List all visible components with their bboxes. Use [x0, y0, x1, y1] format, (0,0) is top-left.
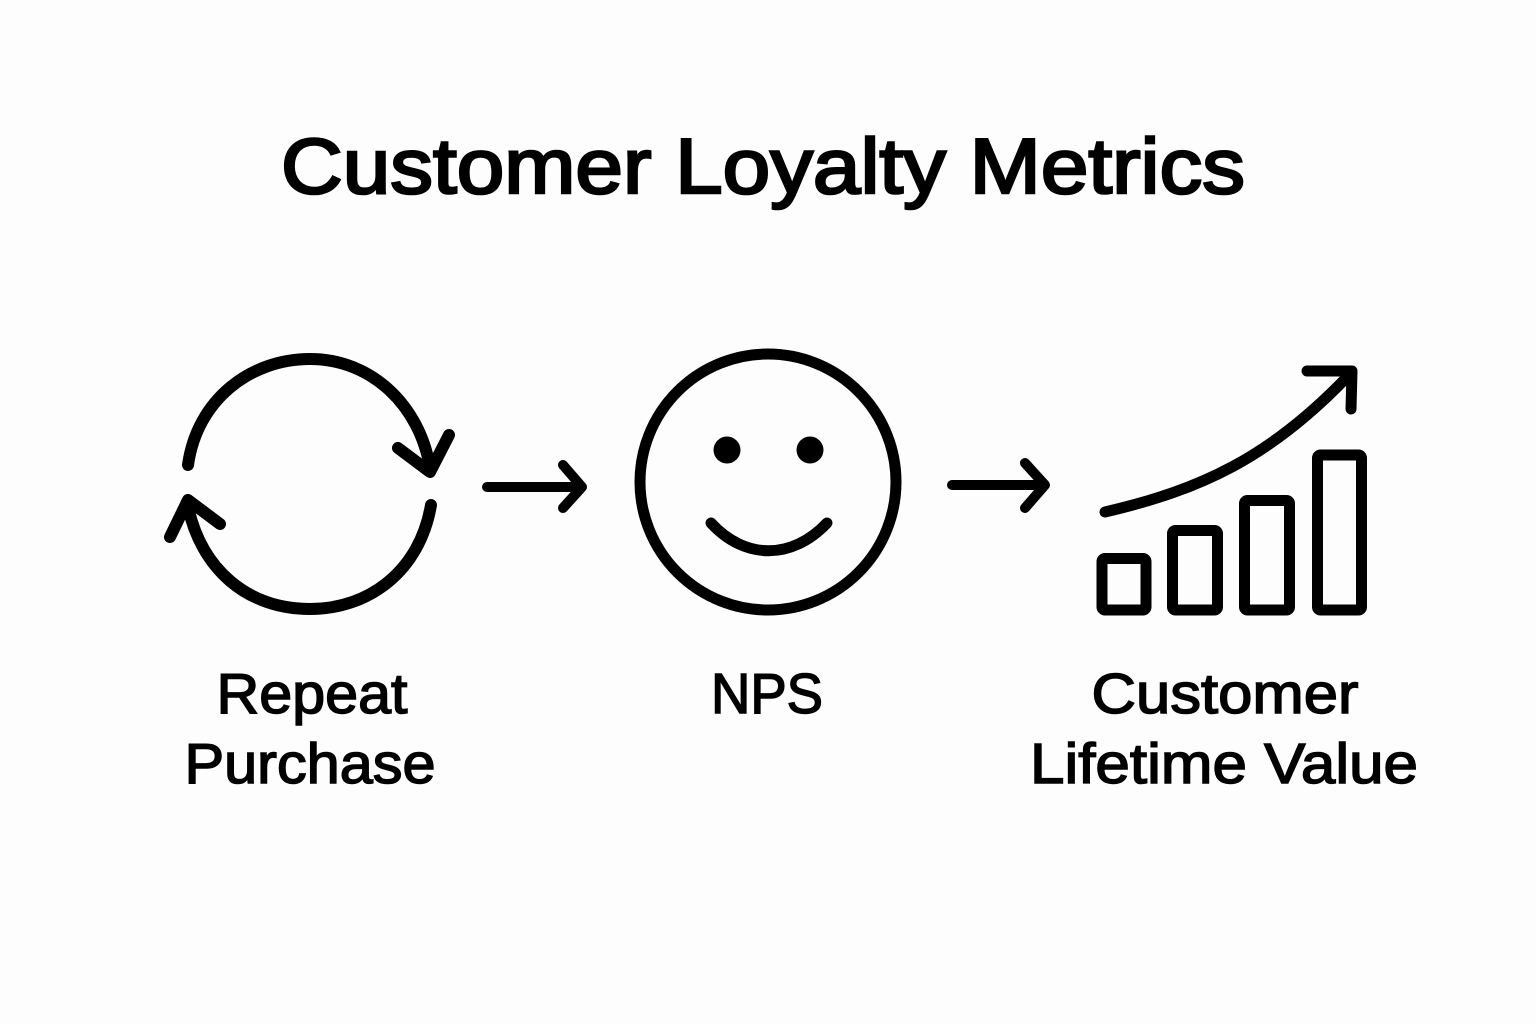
label: customer lifetime value: Lifetime Value	[1030, 732, 1418, 796]
label: customer lifetime value: Customer	[1092, 662, 1359, 726]
icon: repeat cycle arrows	[170, 359, 449, 609]
icon: smiley face	[640, 354, 896, 610]
title: Customer Loyalty Metrics	[281, 122, 1245, 210]
arrow: repeat purchase to NPS	[487, 465, 582, 508]
label: NPS: NPS	[711, 662, 823, 726]
arrow: NPS to customer lifetime value	[952, 463, 1045, 508]
label: repeat purchase	[184, 662, 436, 796]
icon: growth bar chart with arrow	[1102, 371, 1362, 610]
label: repeat purchase: Repeat	[216, 662, 408, 726]
label: customer lifetime value	[1030, 662, 1418, 796]
label: repeat purchase: Purchase	[184, 732, 436, 796]
